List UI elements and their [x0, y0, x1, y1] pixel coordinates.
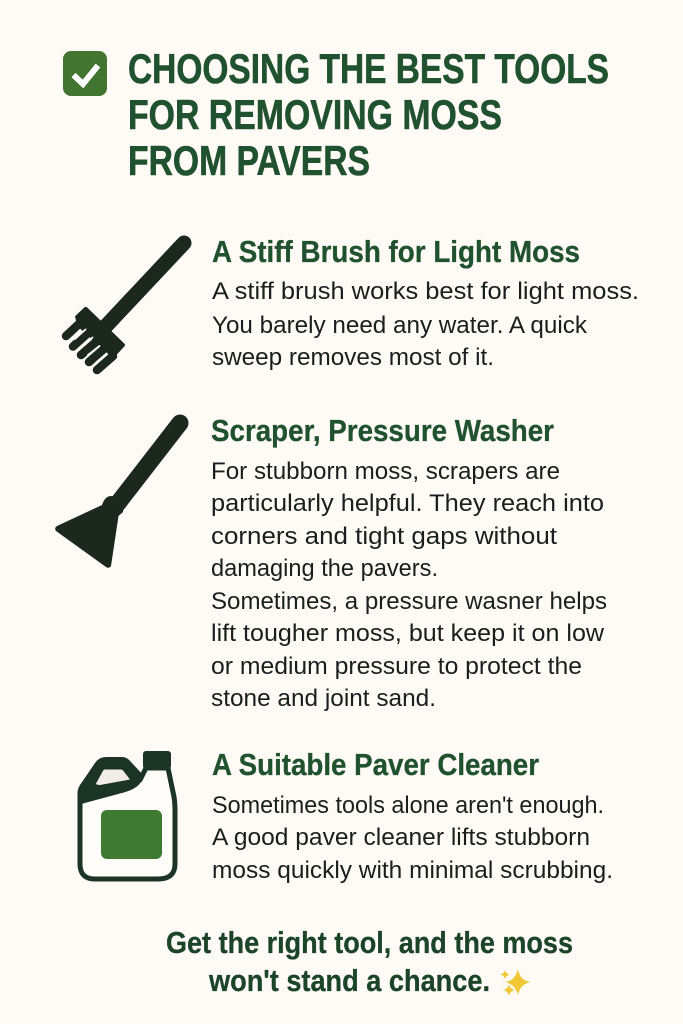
section 2 text: corners and tight gaps without: [211, 523, 557, 550]
icon: cleaner jug: [78, 751, 175, 879]
section 1 text: A stiff brush works best for light moss.: [212, 278, 639, 305]
section 1 text: [212, 278, 639, 371]
section 2 text: For stubborn moss, scrapers are: [211, 458, 560, 485]
section 2 text: stone and joint sand.: [211, 685, 436, 712]
section 2 text: or medium pressure to protect the: [211, 653, 582, 680]
section 2 text: [211, 458, 607, 712]
closing message: Get the right tool, and the moss: [166, 926, 573, 960]
section 2 text: particularly helpful. They reach into: [211, 490, 604, 517]
title: [128, 45, 609, 184]
title: FOR REMOVING MOSS: [128, 91, 502, 138]
section 3 text: Sometimes tools alone aren't enough.: [212, 792, 604, 819]
section 3 text: A good paver cleaner lifts stubborn: [212, 824, 590, 851]
section 3 text: moss quickly with minimal scrubbing.: [212, 857, 613, 884]
icon: green check box: [63, 51, 107, 96]
section 2 heading: Scraper, Pressure Washer: [211, 413, 554, 448]
section 1 text: sweep removes most of it.: [212, 344, 494, 371]
icon: scraper: [55, 423, 180, 568]
icon: sparkles: [500, 969, 531, 996]
section 2 text: Sometimes, a pressure wasner helps: [211, 588, 607, 615]
section 1 text: You barely need any water. A quick: [212, 312, 588, 339]
section 3 text: [212, 792, 613, 884]
closing message: [166, 926, 573, 998]
section 2 text: lift tougher moss, but keep it on low: [211, 620, 605, 647]
title: FROM PAVERS: [128, 137, 370, 184]
section 2 text: damaging the pavers.: [211, 555, 438, 582]
section 3 heading: A Suitable Paver Cleaner: [212, 747, 539, 782]
section 1 heading: A Stiff Brush for Light Moss: [212, 234, 580, 269]
closing message: won't stand a chance.: [208, 964, 490, 998]
icon: stiff brush: [66, 243, 184, 370]
